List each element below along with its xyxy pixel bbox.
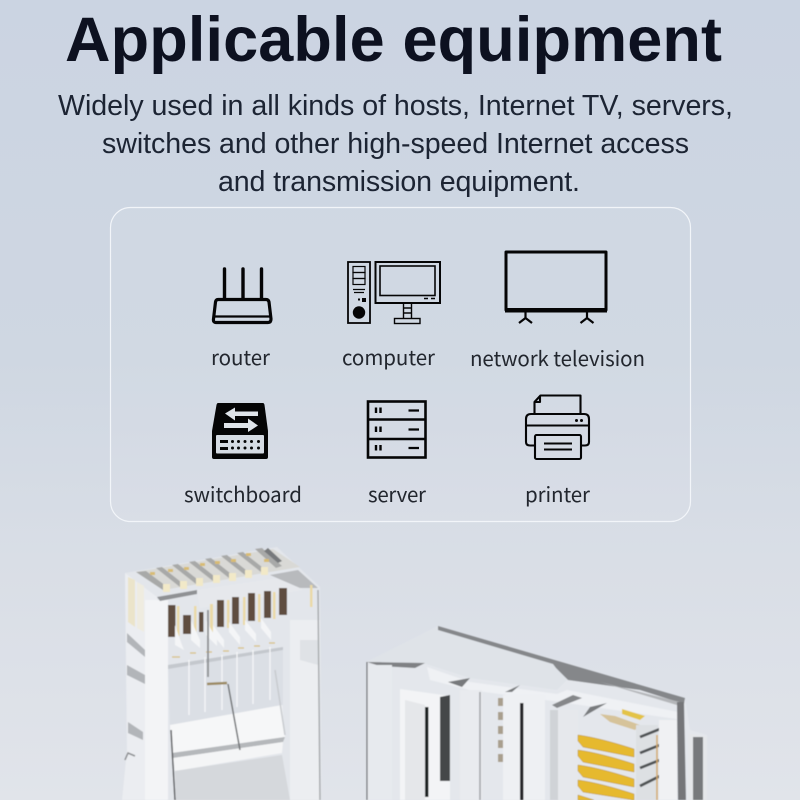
panel: equipment (110, 208, 690, 522)
icon: network television (505, 252, 607, 323)
label: network television: network television (470, 342, 645, 372)
illustration: right RJ45 connector (367, 626, 707, 800)
connector gold contact windows (168, 588, 287, 637)
label: computer: computer (342, 341, 435, 371)
label: server: server (368, 478, 426, 508)
label: printer: printer (525, 478, 590, 508)
description text: and transmission equipment. (218, 166, 580, 198)
illustration: left RJ45 connector (122, 547, 322, 800)
label: router: router (211, 341, 270, 371)
description text (58, 90, 733, 198)
label: switchboard: switchboard (184, 478, 302, 508)
description text: switches and other high-speed Internet access (102, 128, 689, 160)
icon: router (213, 269, 271, 322)
connector contact ridges (136, 548, 300, 592)
icon: printer (526, 396, 589, 459)
title: Applicable equipment (65, 5, 722, 75)
connector white tabs (175, 618, 271, 650)
connector gold dashes (172, 643, 275, 657)
icon: computer (348, 262, 440, 324)
description text: Widely used in all kinds of hosts, Internet TV, servers, (58, 90, 733, 122)
icon: server (368, 402, 426, 458)
icon: switchboard (212, 403, 268, 459)
connector yellow contacts (578, 735, 634, 800)
